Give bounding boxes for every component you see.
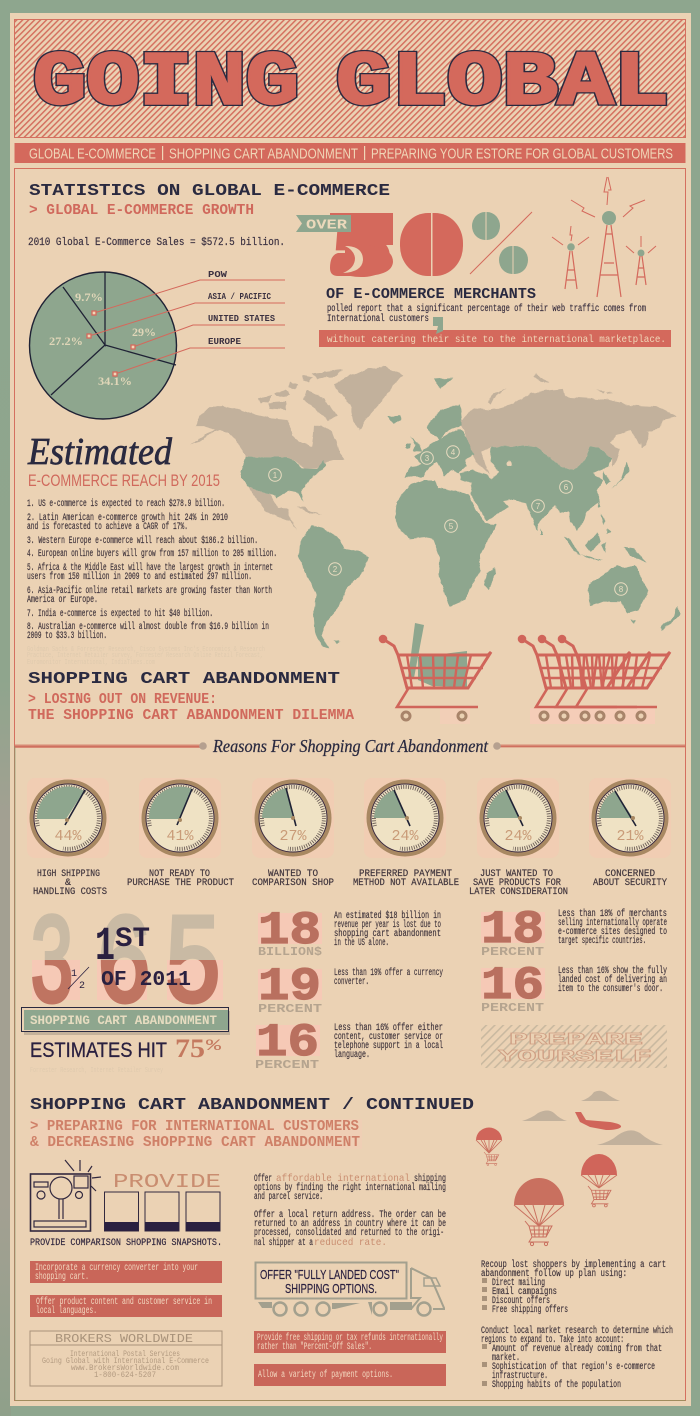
parachute medium: [581, 1154, 617, 1207]
gauge captions: &: [65, 878, 71, 889]
map numbers: 5: [449, 522, 454, 531]
heading: continued: SHOPPING CART ABANDONMENT / CONTINUED: [30, 1096, 474, 1115]
market research list: Shopping habits of the population: [492, 1379, 621, 1391]
recoup list: [481, 1259, 666, 1316]
source note: [27, 646, 265, 667]
merchants callout: [319, 330, 671, 347]
merchants text: [327, 303, 646, 325]
estimated script heading: Estimated: [27, 431, 173, 473]
market research list: [481, 1325, 673, 1391]
gauge: 24 percent second: [477, 778, 559, 858]
gauge captions: METHOD NOT AVAILABLE: [353, 878, 459, 889]
map: europe asia africa oceania: [395, 374, 682, 630]
gauge captions: HANDLING COSTS: [33, 887, 107, 898]
over 50 percent graphic: [296, 198, 532, 295]
shipping text block: [254, 1173, 446, 1249]
stat: 16 percent: PERCENT: [255, 1058, 319, 1072]
prepare yourself panel: YOURSELF: [498, 1047, 652, 1066]
reasons divider: [15, 736, 686, 758]
truck with shipping text: SHIPPING OPTIONS.: [285, 1281, 377, 1296]
map numbers: 3: [425, 454, 430, 463]
shipping text block: and parcel service.: [254, 1191, 323, 1203]
365 first half graphic: 5: [166, 891, 220, 1027]
prepare yourself panel: [481, 1025, 667, 1068]
plane: [575, 1112, 621, 1130]
estimates list: 2. Latin American e-commerce growth hit 24% in 2010: [27, 512, 228, 524]
estimates list: and is forecasted to achieve a CAGR of 17%.: [27, 521, 188, 533]
heading: statistics: STATISTICS ON GLOBAL E-COMMERCE: [29, 182, 390, 201]
pie chart: [30, 269, 285, 419]
map numbers: 7: [536, 502, 541, 511]
brokers worldwide box: BROKERS WORLDWIDE: [55, 1333, 193, 1346]
shipping text block: Offer: [254, 1173, 272, 1185]
shipping text block: returned to an address in country where it can be: [254, 1218, 446, 1230]
source note: Practice, Internet Retailer survey, Forrester Research Online Retail Forecast,: [27, 652, 263, 660]
shipping text block: affordable international: [276, 1173, 410, 1185]
stat text: 18 billion: [334, 910, 441, 949]
shipping text block: reduced rate.: [314, 1237, 387, 1249]
callout: local languages: Offer product content and customer service in: [36, 1296, 212, 1308]
gauge captions: JUST WANTED TO: [480, 869, 553, 880]
brokers worldwide box: www.BrokersWorldwide.com: [71, 1364, 179, 1373]
recoup list: abandonment follow up plan using:: [481, 1268, 627, 1280]
stat text: 16 percent: telephone support in a local: [334, 1040, 443, 1052]
pie legend: [208, 269, 275, 347]
callout: local languages: [30, 1295, 222, 1317]
estimates hit 75 percent: %: [206, 1037, 222, 1055]
callout: payment options: [254, 1364, 446, 1386]
title: GOING: [33, 40, 299, 126]
gauge captions: ABOUT SECURITY: [593, 878, 667, 889]
stat text: 18 billion: in the US alone.: [334, 937, 389, 949]
pie leader lines: [87, 280, 285, 376]
title: [33, 40, 669, 126]
over flag: [296, 215, 351, 234]
estimates list: 3. Western Europe e-commerce will reach about $186.2 billion.: [27, 535, 258, 547]
pie chart: 27.2%: [49, 336, 83, 348]
stat text: 19 percent: converter.: [334, 977, 369, 988]
stat: 19 percent: PERCENT: [258, 1002, 322, 1016]
prepare yourself panel: PREPARE: [509, 1030, 643, 1049]
map markers: [269, 446, 627, 595]
over 50 percent graphic: 5: [330, 199, 393, 295]
snapshots frames: [104, 1192, 220, 1231]
365 first half graphic: 1: [95, 921, 115, 974]
callout: currency converter: [30, 1261, 222, 1283]
subheading: losing out: > LOSING OUT ON REVENUE:: [28, 692, 217, 708]
gauge captions: [33, 869, 667, 898]
provide heading: PROVIDE: [113, 1171, 221, 1193]
pie chart: 29%: [132, 327, 156, 339]
365 first half graphic: OF 2011: [101, 969, 191, 992]
pie legend: POW: [208, 269, 227, 280]
recoup list: Direct mailing: [492, 1277, 545, 1289]
gauge: 27 percent: 27%: [279, 828, 307, 845]
stat: 16 percent landed: PERCENT: [481, 1001, 544, 1015]
title banner: [14, 20, 686, 138]
gauge captions: COMPARISON SHOP: [252, 878, 334, 889]
map numbers: 4: [451, 448, 456, 457]
pie chart: 9.7%: [75, 292, 103, 304]
365 first half graphic: 6: [98, 891, 150, 1027]
truck with shipping text: [256, 1262, 444, 1316]
stat text: landed cost: [558, 965, 667, 995]
estimates list: 5. Africa & the Middle East will have the largest growth in internet: [27, 562, 273, 574]
gauge captions: SAVE PRODUCTS FOR: [473, 878, 561, 889]
brokers worldwide box: Going Global with International E-Commerce: [42, 1357, 209, 1366]
callout: local languages: local languages.: [36, 1305, 97, 1317]
merchants heading: OF E-COMMERCE MERCHANTS: [326, 286, 536, 303]
estimates list: 8. Australian e-commerce will almost double from $16.9 billion in: [27, 621, 269, 633]
365 first half graphic: [31, 891, 223, 1027]
recoup list: Free shipping offers: [492, 1304, 568, 1316]
estimates hit 75 percent: Forrester Research, Internet Retailer Survey: [30, 1067, 163, 1075]
callout: payment options: Allow a variety of payment options.: [258, 1369, 393, 1381]
estimates hit 75 percent: 75: [175, 1034, 205, 1063]
gauge captions: WANTED TO: [268, 869, 318, 880]
gauge: 41 percent: 41%: [166, 828, 194, 845]
gauge captions: NOT READY TO: [149, 869, 210, 880]
brokers worldwide box: 1-800-624-5207: [94, 1371, 156, 1380]
365 first half graphic: 2: [79, 981, 85, 992]
stat text: 18 billion: An estimated $18 billion in: [334, 910, 441, 922]
shipping text block: shipping: [414, 1173, 446, 1185]
365 first half graphic: ST: [115, 924, 150, 955]
estimates list: 6. Asia-Pacific online retail markets are growing faster than North: [27, 585, 272, 597]
subheading: preparing: [30, 1119, 362, 1151]
sales statement: 2010 Global E-Commerce Sales = $572.5 billion.: [28, 237, 285, 249]
gauge captions: LATER CONSIDERATION: [469, 887, 568, 898]
estimates hit 75 percent: [30, 1034, 222, 1075]
gauge: 44 percent: [27, 778, 109, 858]
gauge: 41 percent: [139, 778, 221, 858]
map numbers: 1: [273, 471, 278, 480]
365 first half graphic: 3: [31, 891, 73, 1027]
gauge captions: PREFERRED PAYMENT: [359, 869, 452, 880]
over 50 percent graphic: 0: [401, 198, 463, 294]
gauge captions: HIGH SHIPPING: [37, 869, 100, 880]
brokers worldwide box: [30, 1331, 222, 1386]
stat text: 19 percent: [334, 967, 443, 988]
estimates list: 4. European online buyers will grow from 157 million to 205 million.: [27, 548, 277, 560]
abandonment label box: SHOPPING CART ABANDONMENT: [30, 1013, 217, 1028]
gauge: 21 percent: [589, 778, 671, 858]
map: americas: [190, 367, 403, 648]
abandonment label box: [22, 1008, 230, 1035]
title: GLOBAL: [336, 40, 669, 126]
shipping text block: processed, consolidated and returned to the origi-: [254, 1227, 444, 1239]
pie legend: UNITED STATES: [208, 313, 275, 324]
market research list: market.: [492, 1352, 520, 1364]
pie chart: 34.1%: [98, 376, 132, 388]
green comma: [433, 317, 443, 334]
estimates hit 75 percent: ESTIMATES HIT: [30, 1039, 167, 1062]
gauge: 44 percent: 44%: [54, 828, 82, 845]
estimates list: users from 150 million in 2009 to and estimated 297 million.: [27, 571, 252, 583]
gauge: 27 percent: [252, 778, 334, 858]
gauge captions: PURCHASE THE PRODUCT: [127, 878, 234, 889]
radio towers: [552, 177, 656, 297]
subheading: losing out: [28, 692, 354, 724]
shipping text block: nal shipper at a: [254, 1237, 313, 1249]
map numbers: 6: [564, 483, 569, 492]
title: GOING: [33, 40, 299, 126]
stat text: 19 percent: Less than 19% offer a currency: [334, 967, 443, 979]
callout: free shipping: Provide free shipping or tax refunds internationally: [257, 1332, 443, 1344]
subtitle band: SHOPPING CART ABANDONMENT: [169, 146, 358, 162]
stat text: 16 percent: [334, 1022, 443, 1061]
stat: 16 percent landed: 16: [481, 960, 544, 1012]
gauge: 24 percent: 24%: [391, 828, 419, 845]
stat: 16 percent: 16: [256, 1017, 319, 1069]
callout: free shipping: rather than "Percent-Off Sales".: [257, 1341, 372, 1353]
brokers worldwide box: International Postal Services: [70, 1350, 180, 1359]
365 first half graphic: 1: [71, 969, 77, 980]
stat text: 18 billion: shopping cart abandonment: [334, 928, 441, 940]
estimates list: 1. US e-commerce is expected to reach $278.9 billion.: [27, 498, 225, 510]
stat: 18 percent: 18: [481, 904, 544, 956]
row of carts: [519, 636, 670, 724]
over flag: OVER: [306, 218, 348, 234]
gauge captions: CONCERNED: [605, 869, 655, 880]
recoup list: Discount offers: [492, 1295, 550, 1307]
truck with shipping text: OFFER "FULLY LANDED COST": [260, 1267, 399, 1282]
gauge: 24 percent second: 24%: [504, 828, 532, 845]
stat text: 16 percent: Less than 16% offer either: [334, 1022, 443, 1034]
callout: currency converter: Incorporate a currency converter into your: [35, 1262, 198, 1274]
subheading: losing out: THE SHOPPING CART ABANDONMENT DILEMMA: [28, 708, 354, 724]
pie legend: EUROPE: [208, 336, 241, 347]
source note: Goldman Sachs & Forrester Research, Cisco Systems Inc's Economics & Research: [27, 646, 265, 654]
heading: abandonment: SHOPPING CART ABANDONMENT: [28, 670, 340, 689]
estimates list: 7. India e-commerce is expected to hit $40 billion.: [27, 608, 213, 620]
shipping text block: Offer a local return address. The order can be: [254, 1209, 446, 1221]
pie legend: ASIA / PACIFIC: [208, 291, 271, 302]
parachute large: [514, 1178, 564, 1246]
merchants text: International customers: [327, 313, 429, 325]
stat: 18 billion: 18: [258, 905, 321, 957]
title: GLOBAL: [336, 40, 669, 126]
parachute small: [476, 1128, 502, 1166]
stat: 19 percent: 19: [258, 961, 321, 1013]
subtitle band: GLOBAL E-COMMERCE: [29, 146, 156, 162]
gauge: 24 percent: [364, 778, 446, 858]
subheading: preparing: > PREPARING FOR INTERNATIONAL CUSTOMERS: [30, 1119, 359, 1135]
map numbers: 8: [619, 585, 624, 594]
subheading: growth: > GLOBAL E-COMMERCE GROWTH: [29, 203, 254, 219]
stat text: merchants: [558, 908, 667, 947]
estimates list: 2009 to $33.3 billion.: [27, 630, 107, 642]
stat text: 16 percent: content, customer service or: [334, 1031, 443, 1043]
stat: 18 percent: PERCENT: [481, 945, 544, 959]
subtitle band: [14, 143, 686, 163]
estimates list: [27, 498, 277, 642]
callout: currency converter: shopping cart.: [35, 1271, 89, 1283]
icon: camera: [30, 1160, 101, 1231]
callout: free shipping: [254, 1331, 446, 1353]
cart with goods: [380, 623, 491, 724]
estimates list: America or Europe.: [27, 594, 98, 606]
shipping text block: options by finding the right international mailing: [254, 1182, 446, 1194]
map numbers: [273, 448, 624, 594]
map numbers: 2: [333, 565, 338, 574]
source note: Euromonitor International, IndiaTimes.com: [27, 659, 155, 667]
world map: [190, 367, 682, 648]
stat text: 18 billion: revenue per year is lost due to: [334, 919, 441, 931]
market research list: infrastructure.: [492, 1370, 548, 1382]
clouds: [522, 1091, 663, 1145]
merchants callout: without catering their site to the international marketplace.: [327, 334, 666, 346]
subheading: preparing: & DECREASING SHOPPING CART ABANDONMENT: [30, 1135, 360, 1151]
reasons divider: Reasons For Shopping Cart Abandonment: [212, 736, 489, 756]
stat: 18 billion: BILLION$: [258, 945, 322, 959]
snapshots caption: PROVIDE COMPARISON SHOPPING SNAPSHOTS.: [30, 1238, 222, 1249]
recoup list: Email campaigns: [492, 1286, 557, 1298]
gauge: 21 percent: 21%: [616, 828, 644, 845]
stat text: 16 percent: language.: [334, 1049, 370, 1061]
reach subheading: E-COMMERCE REACH BY 2015: [28, 471, 220, 490]
